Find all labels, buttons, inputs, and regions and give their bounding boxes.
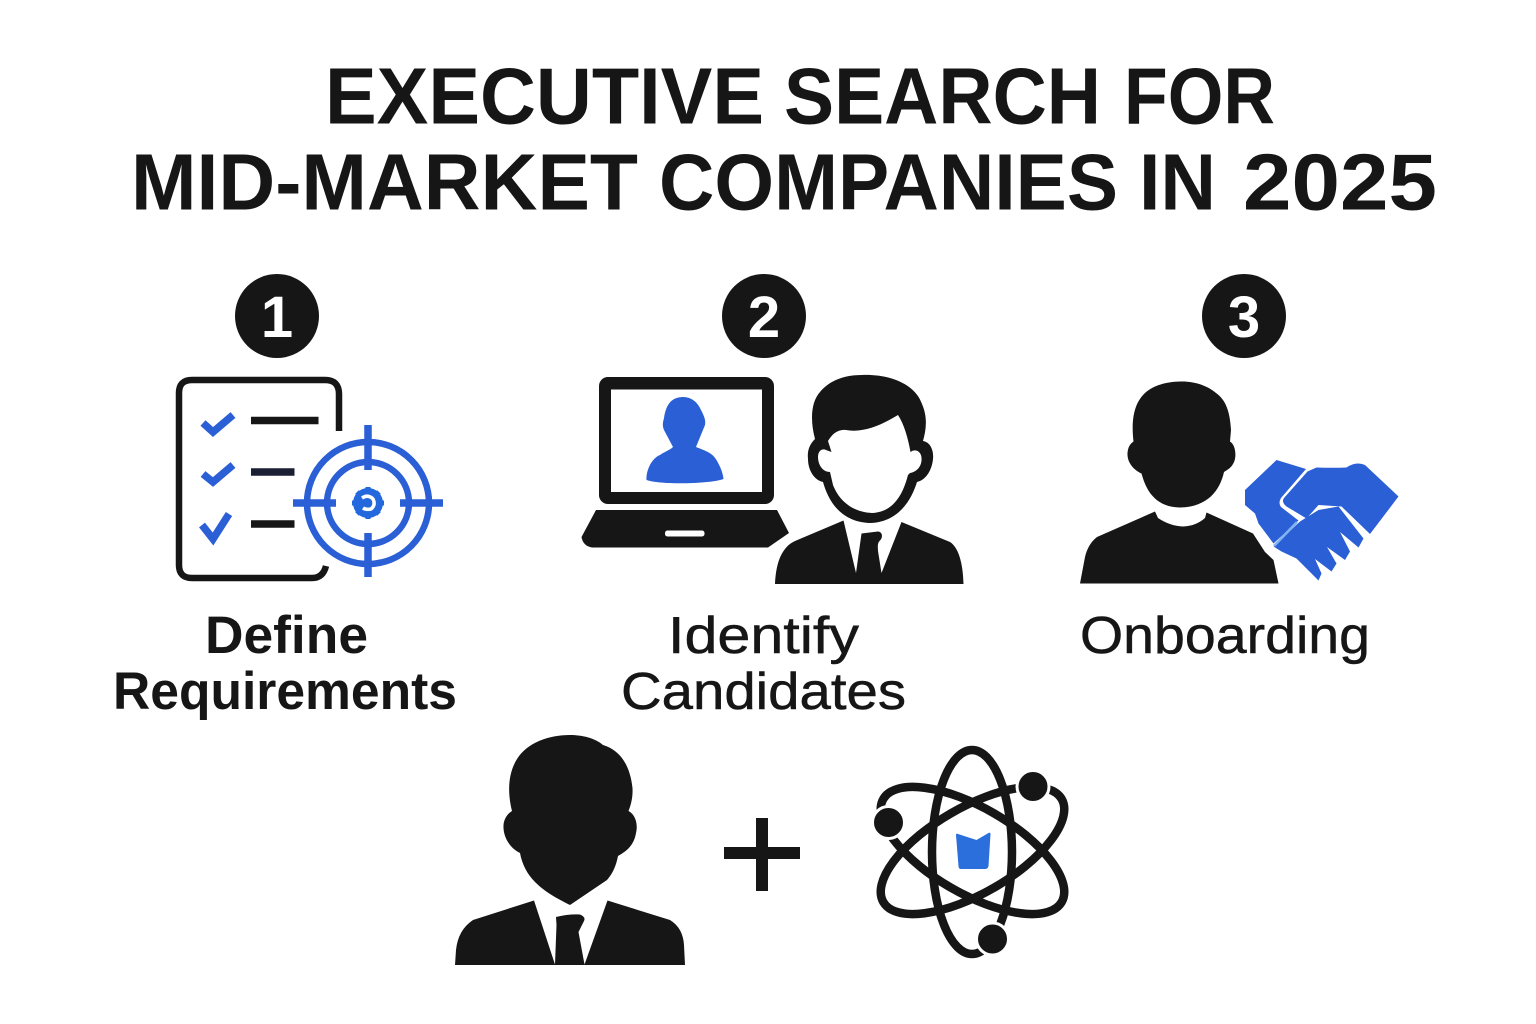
step 1 number badge [235, 274, 319, 358]
label: onboarding: Onboarding [1080, 607, 1370, 665]
title: IN [1139, 138, 1216, 226]
title: EXECUTIVE [325, 52, 764, 140]
step 1 number badge: 1 [261, 285, 293, 350]
icon: plus sign [724, 818, 800, 891]
label: define requirements: Requirements [113, 662, 457, 721]
title: 2025 [1243, 138, 1437, 226]
icon: executive in suit [455, 735, 685, 965]
icon: laptop with candidate on screen [582, 377, 789, 548]
icon: candidate in suit [775, 375, 964, 584]
icon: checklist with target [179, 380, 443, 578]
label: identify candidates: Identify [668, 607, 859, 665]
title: SEARCH [784, 52, 1101, 140]
title: FOR [1124, 52, 1275, 140]
step 3 number badge [1202, 274, 1286, 358]
label: identify candidates: Candidates [621, 663, 906, 721]
label: define requirements [113, 606, 457, 721]
step 3 number badge: 3 [1228, 285, 1260, 350]
title [131, 52, 1437, 226]
icon: handshake [1245, 460, 1398, 580]
step 2 number badge [722, 274, 806, 358]
label: define requirements: Define [205, 606, 368, 665]
step 2 number badge: 2 [748, 285, 780, 350]
label: identify candidates [621, 607, 906, 721]
icon: atom with blue core [862, 750, 1083, 955]
icon: person silhouette [1080, 381, 1278, 584]
title: COMPANIES [659, 138, 1118, 226]
title: MID-MARKET [131, 138, 638, 226]
